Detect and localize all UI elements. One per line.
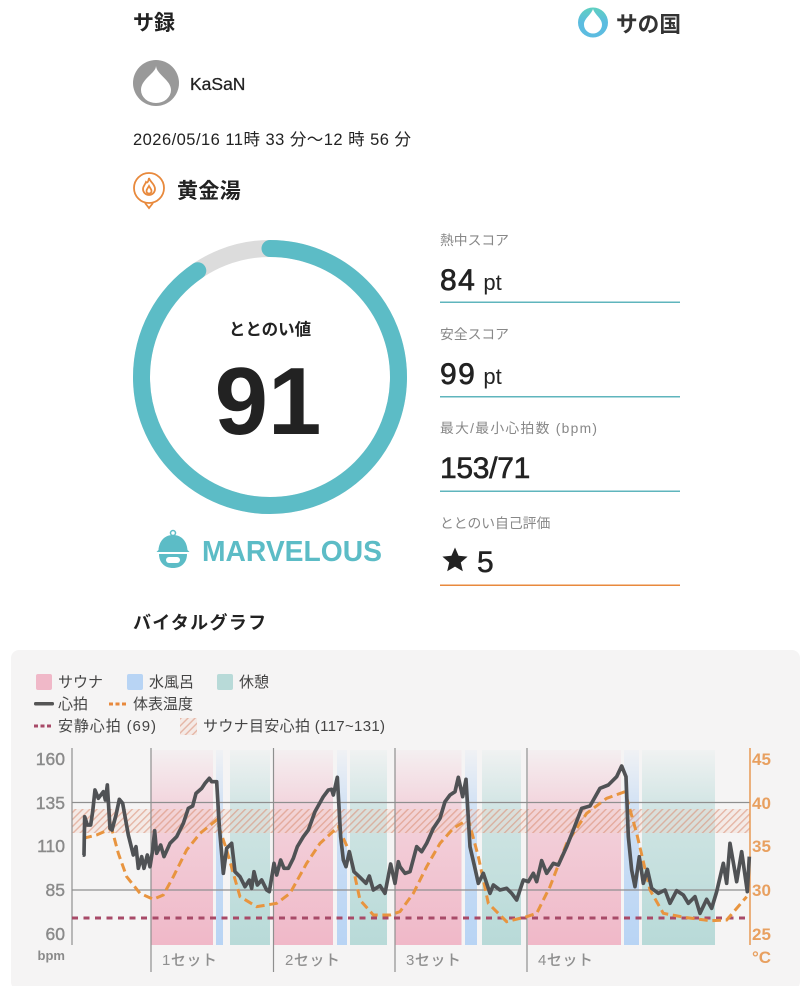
icon: logo water drop xyxy=(578,8,608,38)
right axis labels: °C xyxy=(752,948,771,967)
icon: sauna hat xyxy=(156,530,190,568)
stat: safety score: 99 pt xyxy=(440,358,502,391)
stat: heart rate: 最大/最小心拍数 (bpm) xyxy=(440,421,597,436)
legend: サウナ xyxy=(58,674,103,691)
logo wordmark: サの国 xyxy=(616,12,681,37)
right axis labels xyxy=(752,750,771,967)
stat: safety score: 安全スコア xyxy=(440,327,509,342)
legend: 安静心拍 (69) xyxy=(58,718,156,735)
left axis labels: 160 xyxy=(36,749,65,769)
legend: 心拍 xyxy=(58,696,88,713)
right axis labels: 45 xyxy=(752,750,771,769)
chart axes and grid xyxy=(72,748,750,972)
left axis labels: 110 xyxy=(37,836,65,856)
vital graph heading: バイタルグラフ xyxy=(133,612,267,633)
facility name: 黄金湯 xyxy=(177,180,241,203)
resting heart-rate line xyxy=(72,916,747,920)
stat: self rating: 5 xyxy=(477,546,494,579)
stat: heart rate xyxy=(440,421,680,492)
set labels: 1セット xyxy=(162,952,217,969)
set labels xyxy=(162,952,593,969)
ring label: ととのい値 xyxy=(229,320,311,339)
target heart-rate band xyxy=(72,809,750,833)
date and time: 2026/05/16 11時 33 分～12 時 56 分 xyxy=(133,130,412,149)
left axis labels xyxy=(36,749,65,963)
set labels: 4セット xyxy=(538,952,593,969)
stat: safety score xyxy=(440,327,680,398)
set labels: 3セット xyxy=(406,952,461,969)
stat: self rating xyxy=(440,516,680,586)
stat: self rating: ととのい自己評価 xyxy=(440,516,550,531)
left axis labels: bpm xyxy=(38,948,65,963)
legend xyxy=(34,673,385,735)
title: サ録 xyxy=(133,12,175,35)
rank label: MARVELOUS xyxy=(202,536,382,568)
panel: vital graph xyxy=(11,650,800,986)
body temperature line xyxy=(83,792,747,922)
rank badge xyxy=(156,530,382,568)
icon: facility pin xyxy=(134,173,164,208)
stat: heart rate: 153/71 xyxy=(440,452,530,485)
legend: サウナ目安心拍 (117~131) xyxy=(203,718,385,735)
score ring xyxy=(142,248,398,506)
logo: サの国 xyxy=(578,8,681,38)
heart rate line xyxy=(83,766,749,913)
ring value: 91 xyxy=(215,348,321,455)
user name: KaSaN xyxy=(190,74,245,94)
stat: heat score: 熱中スコア xyxy=(440,233,509,248)
left axis labels: 60 xyxy=(46,924,65,944)
chart zones xyxy=(151,750,715,945)
right axis labels: 25 xyxy=(752,925,771,944)
stat: heat score xyxy=(440,233,680,303)
left axis labels: 85 xyxy=(46,880,65,900)
legend: 水風呂 xyxy=(149,674,194,691)
stat: heat score: 84 pt xyxy=(440,264,502,297)
legend: 休憩 xyxy=(239,673,269,691)
right axis labels: 35 xyxy=(752,837,771,856)
right axis labels: 30 xyxy=(752,881,771,900)
set labels: 2セット xyxy=(285,952,340,969)
left axis labels: 135 xyxy=(36,793,65,813)
user avatar xyxy=(133,60,179,106)
legend: 体表温度 xyxy=(133,696,193,713)
right axis labels: 40 xyxy=(752,794,771,813)
